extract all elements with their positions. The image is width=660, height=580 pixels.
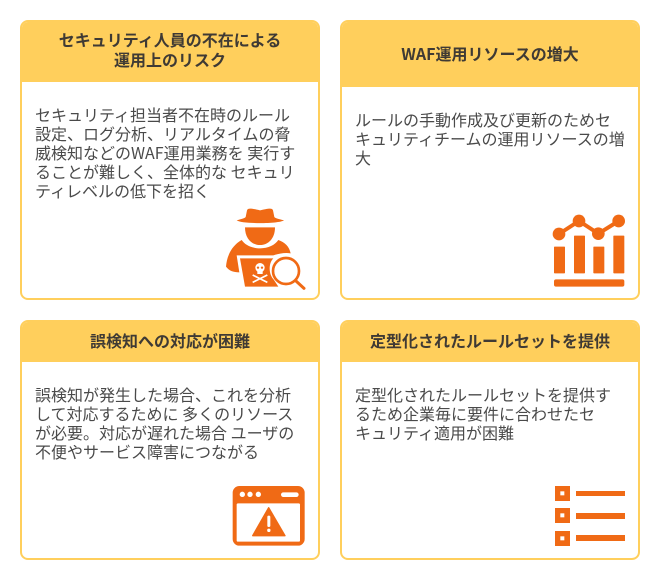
heading: false positive handling: 誤検知への対応が困難 <box>90 328 250 352</box>
panel: WAF operation resources <box>340 20 640 300</box>
text: security staff absence description: ることが難しく、全体的な セキュリ <box>35 159 295 183</box>
heading: security staff absence <box>20 20 320 82</box>
text: WAF operation resources description: キュリティチームの運用リソースの増 <box>355 126 625 150</box>
text: false positive handling description: が必要。対応が遅れた場合 ユーザの <box>35 420 294 444</box>
heading: WAF operation resources: WAF運用リソースの増大 <box>401 40 579 64</box>
text: standardized rule sets description: キュリティ適用が困難 <box>355 420 514 444</box>
text: standardized rule sets description: るため企業毎に要件に合わせたセ <box>355 401 595 425</box>
heading: standardized rule sets: 定型化されたルールセットを提供 <box>370 328 610 352</box>
text: false positive handling description: して対応するために 多くのリソース <box>35 401 293 425</box>
text: security staff absence description: 威検知などのWAF運用業務を 実行す <box>35 140 295 164</box>
text: security staff absence description <box>35 102 295 202</box>
text: false positive handling description: 不便やサービス障害につながる <box>35 439 259 463</box>
heading: security staff absence: セキュリティ人員の不在による <box>59 27 281 51</box>
text: WAF operation resources description: 大 <box>355 145 371 169</box>
text: false positive handling description: 誤検知が発生した場合、これを分析 <box>35 382 291 406</box>
text: security staff absence description: セキュリティ担当者不在時のルール <box>35 102 290 126</box>
text: WAF operation resources description <box>355 107 625 169</box>
icon: browser window with warning <box>232 486 305 546</box>
heading: WAF operation resources <box>340 20 640 87</box>
text: security staff absence description: ティレベルの低下を招く <box>35 178 210 202</box>
icon: hacker with magnifier <box>226 208 306 290</box>
text: false positive handling description <box>35 382 294 463</box>
heading: security staff absence: 運用上のリスク <box>114 47 226 71</box>
magnifier handle <box>296 281 304 288</box>
text: standardized rule sets description: 定型化されたルールセットを提供す <box>355 382 611 406</box>
text: WAF operation resources description: ルールの手動作成及び更新のためセ <box>355 107 611 131</box>
text: standardized rule sets description <box>355 382 611 444</box>
icon: checklist <box>555 486 625 546</box>
heading: standardized rule sets <box>340 320 640 362</box>
panel: standardized rule sets <box>340 320 640 560</box>
panel: security staff absence <box>20 20 320 300</box>
magnifier lens <box>273 258 299 284</box>
icon: bar chart with trend line <box>552 214 625 287</box>
heading: false positive handling <box>20 320 320 362</box>
panel: false positive handling <box>20 320 320 560</box>
text: security staff absence description: 設定、ログ分析、リアルタイムの脅 <box>35 121 291 145</box>
